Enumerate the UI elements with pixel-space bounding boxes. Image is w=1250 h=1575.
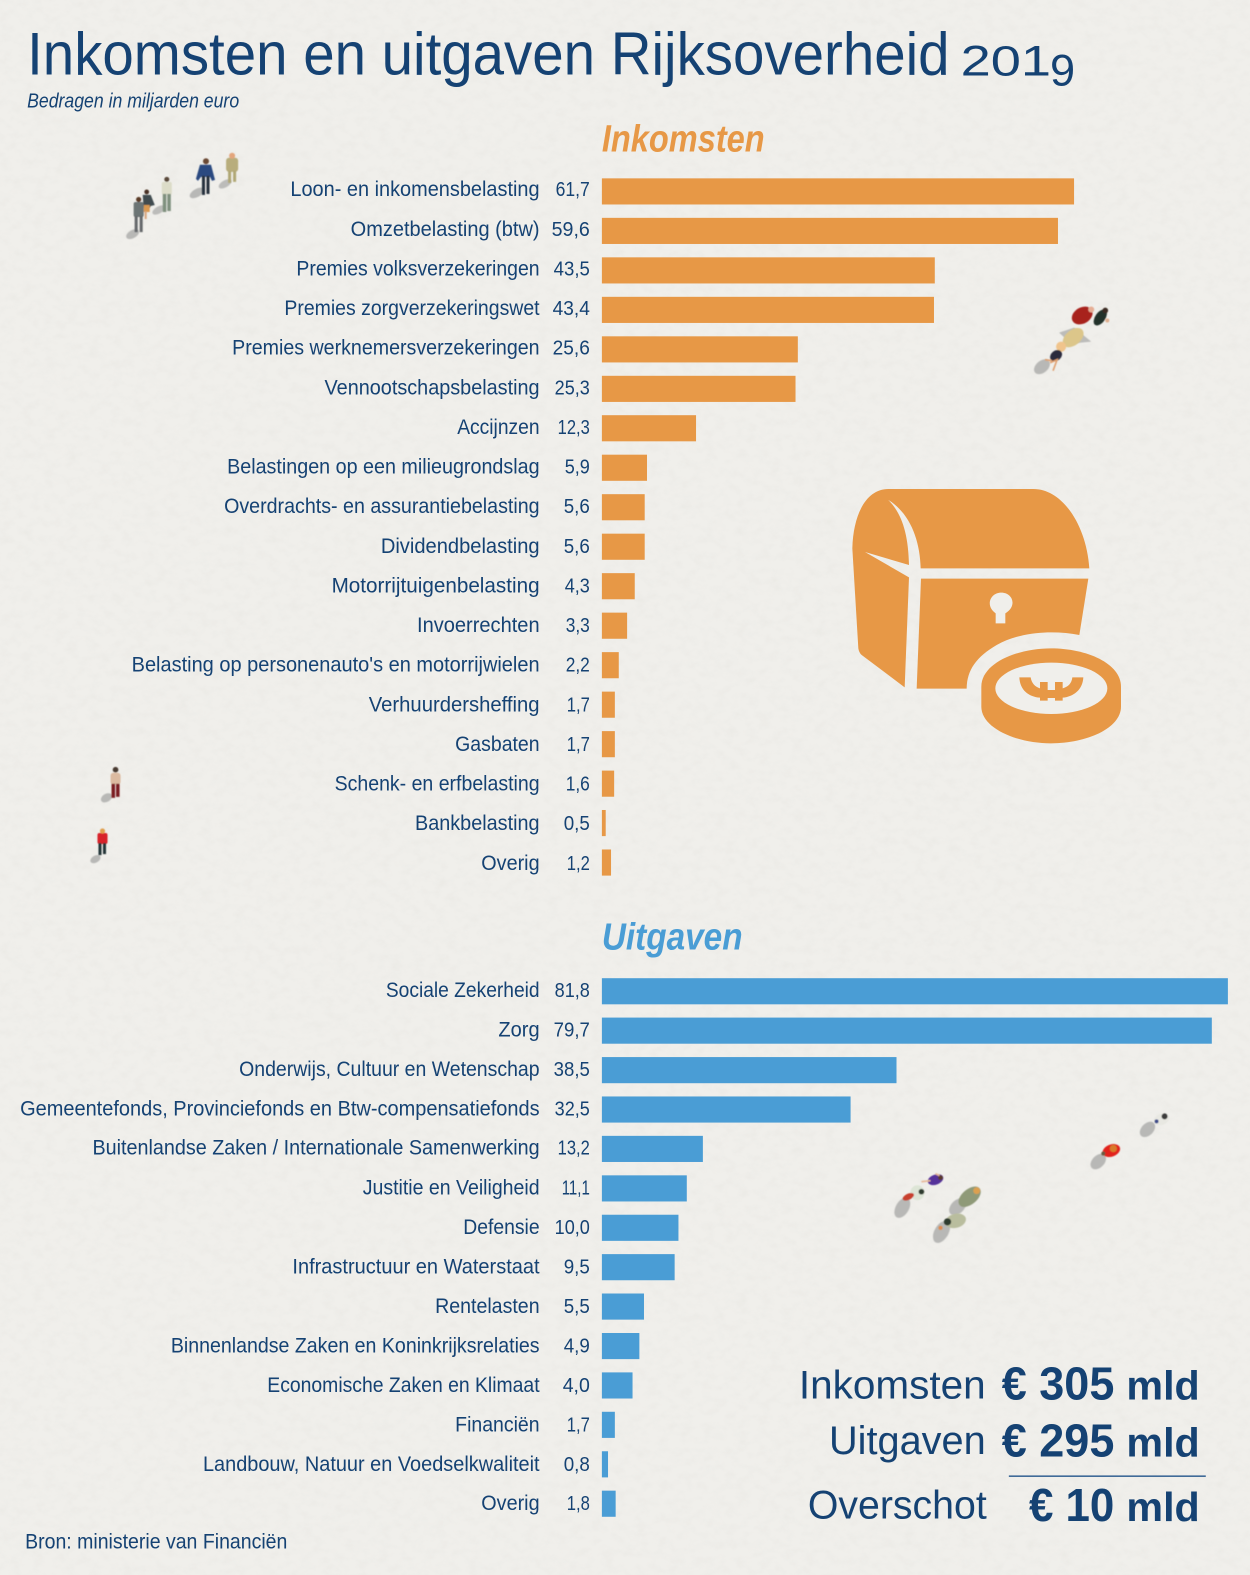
summary totals: [799, 1358, 1206, 1531]
heading: Uitgaven: Uitgaven: [602, 916, 743, 959]
row: Premies zorgverzekeringswet: [284, 297, 934, 323]
title: Inkomsten en uitgaven Rijksoverheid: [27, 19, 950, 87]
row: Verhuurdersheffing: 1,7: [567, 694, 590, 716]
row: Overig: Overig: [481, 1492, 540, 1515]
row: Motorrijtuigenbelasting: Motorrijtuigenbelasting: [332, 574, 540, 597]
row: Accijnzen: [457, 415, 696, 441]
people: group left: [89, 767, 121, 865]
row: Belasting op personenauto's en motorrijwielen: 2,2: [566, 655, 590, 677]
row: Sociale Zekerheid: [386, 978, 1228, 1004]
subtitle: Bedragen in miljarden euro: [27, 91, 239, 113]
row: Schenk- en erfbelasting: [335, 771, 614, 797]
row: Financiën: Financiën: [455, 1413, 540, 1436]
row: Gasbaten: Gasbaten: [455, 733, 540, 756]
row: Dividendbelasting: [381, 534, 645, 560]
row: Infrastructuur en Waterstaat: 9,5: [564, 1256, 590, 1278]
row: Gemeentefonds, Provinciefonds en Btw-compensatiefonds: Gemeentefonds, Provinciefonds en Btw-compensatiefonds: [20, 1097, 540, 1120]
title: 9: [1050, 46, 1075, 95]
row: Overig: Overig: [481, 852, 540, 875]
summary: Uitgaven: € 295: [1002, 1414, 1114, 1466]
row: Motorrijtuigenbelasting: [332, 573, 635, 599]
row: Loon- en inkomensbelasting: 61,7: [556, 179, 590, 201]
row: Buitenlandse Zaken / Internationale Samenwerking: [92, 1136, 703, 1162]
row: Belastingen op een milieugrondslag: Belastingen op een milieugrondslag: [227, 456, 540, 479]
row: Buitenlandse Zaken / Internationale Samenwerking: Buitenlandse Zaken / Internationale Samenwerking: [92, 1137, 540, 1160]
row: Vennootschapsbelasting: Vennootschapsbelasting: [325, 376, 540, 399]
row: Landbouw, Natuur en Voedselkwaliteit: Landbouw, Natuur en Voedselkwaliteit: [203, 1453, 540, 1476]
row: Gemeentefonds, Provinciefonds en Btw-compensatiefonds: [20, 1096, 851, 1123]
row: Landbouw, Natuur en Voedselkwaliteit: 0,8: [564, 1454, 590, 1476]
row: Premies werknemersverzekeringen: Premies werknemersverzekeringen: [232, 337, 540, 360]
row: Onderwijs, Cultuur en Wetenschap: 38,5: [554, 1059, 590, 1081]
row: Onderwijs, Cultuur en Wetenschap: Onderwijs, Cultuur en Wetenschap: [239, 1058, 540, 1081]
row: Omzetbelasting (btw): 59,6: [552, 219, 590, 241]
row: Buitenlandse Zaken / Internationale Samenwerking: 13,2: [558, 1138, 590, 1160]
row: Loon- en inkomensbelasting: Loon- en inkomensbelasting: [290, 178, 540, 201]
row: Invoerrechten: 3,3: [566, 615, 590, 637]
row: Premies volksverzekeringen: Premies volksverzekeringen: [296, 258, 540, 281]
summary: Inkomsten: [799, 1358, 1200, 1410]
row: Bankbelasting: [415, 810, 606, 836]
people: group top right: [1031, 303, 1110, 377]
summary: Overschot: [808, 1479, 1200, 1531]
row: Infrastructuur en Waterstaat: [292, 1254, 675, 1280]
row: Binnenlandse Zaken en Koninkrijksrelaties: Binnenlandse Zaken en Koninkrijksrelaties: [171, 1334, 540, 1357]
row: Schenk- en erfbelasting: 1,6: [566, 774, 590, 796]
row: Accijnzen: 12,3: [558, 417, 590, 439]
people: group top left: [125, 153, 238, 241]
summary: Uitgaven: Uitgaven: [829, 1418, 986, 1463]
row: Overig: [481, 849, 611, 876]
row: Verhuurdersheffing: Verhuurdersheffing: [369, 693, 540, 716]
summary: Uitgaven: [829, 1414, 1200, 1466]
row: Omzetbelasting (btw): Omzetbelasting (btw): [351, 218, 540, 241]
row: Premies werknemersverzekeringen: 25,6: [553, 338, 590, 360]
row: Justitie en Veiligheid: Justitie en Veiligheid: [363, 1176, 540, 1199]
row: Accijnzen: Accijnzen: [457, 416, 540, 439]
row: Rentelasten: 5,5: [564, 1296, 590, 1318]
summary: Inkomsten: Inkomsten: [799, 1363, 986, 1408]
row: Verhuurdersheffing: [369, 692, 615, 718]
row: Justitie en Veiligheid: [363, 1175, 687, 1201]
row: Dividendbelasting: 5,6: [564, 536, 590, 558]
row: Rentelasten: Rentelasten: [435, 1295, 540, 1318]
row: Premies zorgverzekeringswet: 43,4: [553, 298, 590, 320]
row: Bankbelasting: Bankbelasting: [415, 812, 540, 835]
row: Invoerrechten: Invoerrechten: [417, 614, 540, 637]
row: Dividendbelasting: Dividendbelasting: [381, 535, 540, 558]
summary: Overschot: € 10: [1029, 1479, 1114, 1531]
summary: Overschot: Overschot: [808, 1482, 987, 1527]
row: Binnenlandse Zaken en Koninkrijksrelaties: 4,9: [564, 1335, 590, 1357]
icon: treasure chest with euro coin: [852, 489, 1121, 743]
row: Overig: 1,2: [567, 853, 590, 875]
summary: Inkomsten: € 305: [1002, 1358, 1114, 1410]
row: Premies zorgverzekeringswet: Premies zorgverzekeringswet: [284, 297, 540, 320]
row: Overdrachts- en assurantiebelasting: 5,6: [564, 496, 590, 518]
heading: Inkomsten: Inkomsten: [602, 118, 765, 161]
row: Rentelasten: [435, 1294, 644, 1320]
row: Economische Zaken en Klimaat: Economische Zaken en Klimaat: [267, 1374, 540, 1397]
row: Bankbelasting: 0,5: [564, 813, 590, 835]
row: Premies volksverzekeringen: 43,5: [554, 259, 590, 281]
row: Gasbaten: [455, 731, 615, 757]
row: Gasbaten: 1,7: [567, 734, 590, 756]
row: Belastingen op een milieugrondslag: 5,9: [565, 457, 590, 479]
row: Vennootschapsbelasting: [325, 376, 796, 402]
summary: Inkomsten: mld: [1126, 1363, 1200, 1409]
source: Bron: ministerie van Financiën: [25, 1530, 287, 1553]
summary: Uitgaven: mld: [1126, 1419, 1200, 1465]
row: Motorrijtuigenbelasting: 4,3: [565, 575, 590, 597]
people: group bottom middle: [891, 1172, 985, 1246]
row: Premies volksverzekeringen: [296, 257, 935, 283]
row: Defensie: Defensie: [463, 1216, 540, 1239]
row: Defensie: 10,0: [555, 1217, 590, 1239]
row: Overig: 1,8: [567, 1493, 590, 1515]
row: Zorg: [498, 1018, 1212, 1044]
bar chart: Inkomsten: [132, 178, 1074, 876]
row: Zorg: 79,7: [554, 1019, 590, 1041]
title: 201: [961, 37, 1051, 84]
row: Loon- en inkomensbelasting: [290, 178, 1074, 204]
row: Overig: [481, 1491, 616, 1517]
row: Omzetbelasting (btw): [351, 218, 1058, 244]
bar chart: Uitgaven: [20, 978, 1228, 1517]
row: Infrastructuur en Waterstaat: Infrastructuur en Waterstaat: [292, 1255, 540, 1278]
row: Justitie en Veiligheid: 11,1: [562, 1177, 590, 1199]
row: Defensie: [463, 1215, 678, 1241]
people: group bottom right: [1088, 1111, 1171, 1172]
row: Zorg: Zorg: [498, 1018, 540, 1041]
row: Premies werknemersverzekeringen: [232, 336, 798, 362]
summary: Overschot: mld: [1126, 1484, 1200, 1530]
row: Belasting op personenauto's en motorrijwielen: Belasting op personenauto's en motorrijwielen: [132, 654, 540, 677]
row: Onderwijs, Cultuur en Wetenschap: [239, 1057, 897, 1083]
row: Financiën: [455, 1412, 615, 1438]
row: Sociale Zekerheid: 81,8: [555, 980, 590, 1002]
row: Economische Zaken en Klimaat: 4,0: [563, 1375, 590, 1397]
row: Vennootschapsbelasting: 25,3: [555, 377, 590, 399]
row: Gemeentefonds, Provinciefonds en Btw-compensatiefonds: 32,5: [555, 1098, 590, 1120]
row: Schenk- en erfbelasting: Schenk- en erfbelasting: [335, 773, 540, 796]
row: Sociale Zekerheid: Sociale Zekerheid: [386, 979, 540, 1002]
row: Financiën: 1,7: [567, 1414, 590, 1436]
row: Overdrachts- en assurantiebelasting: Overdrachts- en assurantiebelasting: [224, 495, 540, 518]
row: Invoerrechten: [417, 613, 627, 639]
